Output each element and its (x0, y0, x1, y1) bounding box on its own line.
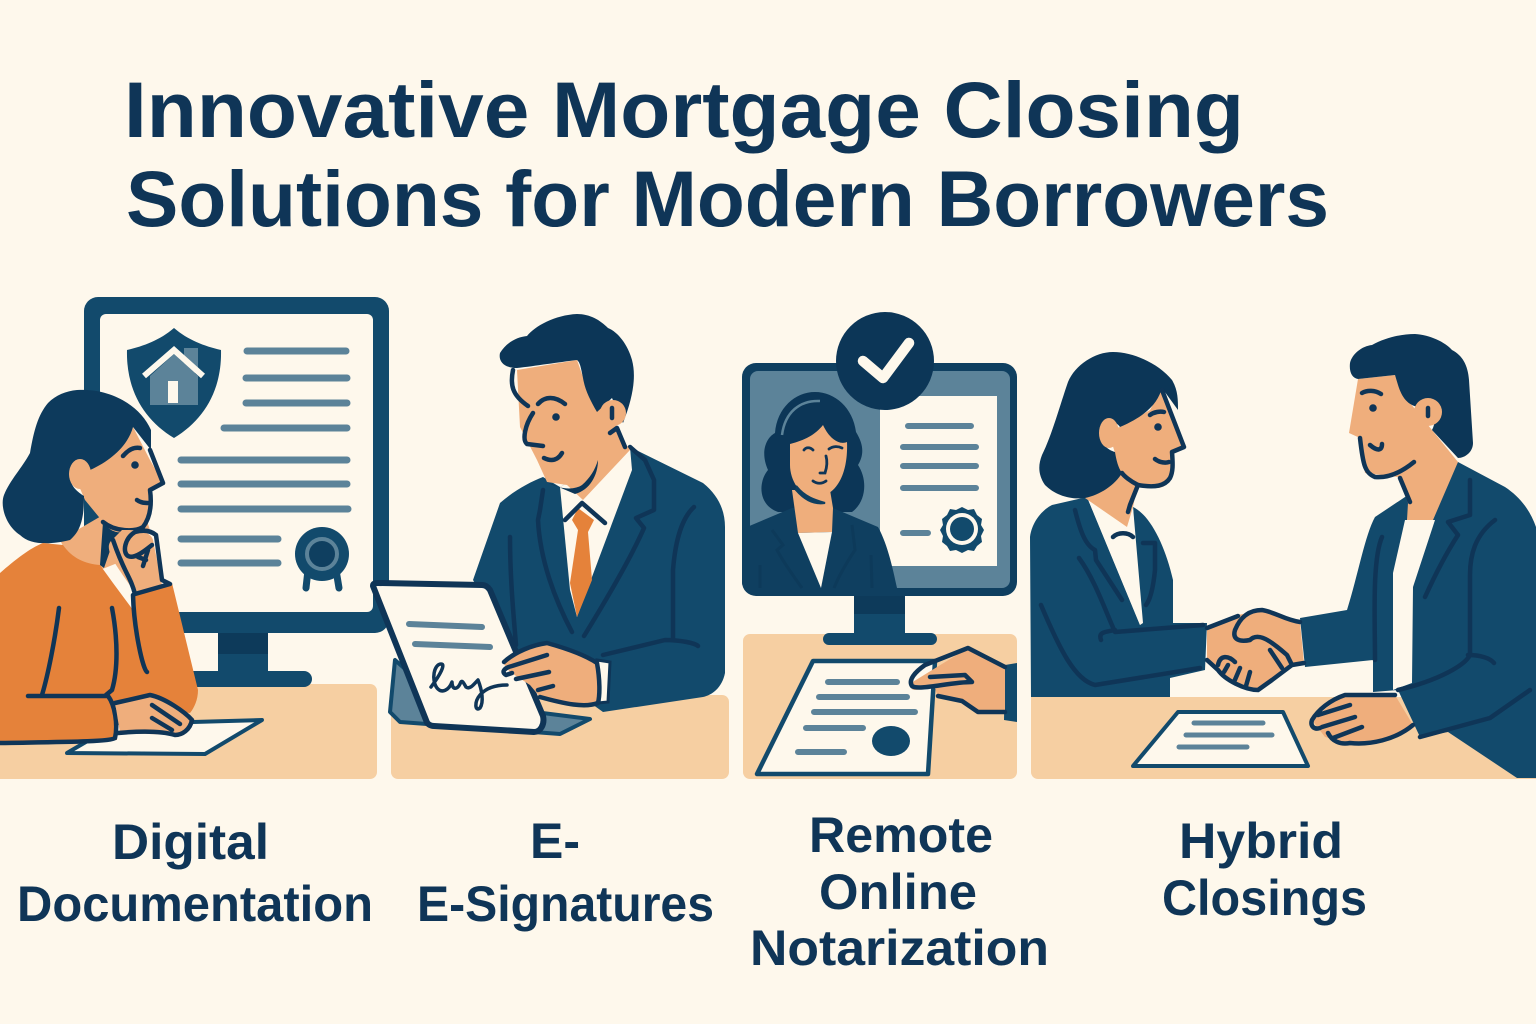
label: hybrid closings (1162, 813, 1367, 926)
tablet with signature (373, 583, 590, 734)
desk (0, 684, 377, 779)
label: remote online notarization: Notarization (750, 920, 1049, 976)
label: e-signatures: E- (530, 813, 580, 869)
desk (1031, 697, 1536, 779)
hand on desk (1311, 693, 1413, 744)
label: e-signatures (417, 813, 714, 932)
handshake (1207, 610, 1304, 690)
label: remote online notarization (750, 807, 1049, 976)
paper on desk (757, 661, 935, 774)
hand holding tablet (503, 643, 610, 705)
label: remote online notarization: Remote (809, 807, 993, 863)
label: remote online notarization: Online (819, 864, 977, 920)
panel: remote online notarization (742, 312, 1017, 779)
desk (391, 695, 729, 779)
title: Innovative Mortgage Closing (124, 65, 1244, 154)
man with suit (473, 314, 725, 712)
woman on video call (742, 392, 897, 588)
hand on paper (910, 648, 1017, 722)
label: digital documentation (17, 814, 373, 932)
label: hybrid closings: Hybrid (1179, 813, 1343, 869)
woman (0, 390, 198, 743)
icon: seal (295, 527, 349, 588)
monitor with document (84, 297, 389, 687)
label: digital documentation: Digital (112, 814, 269, 870)
panel: digital documentation (0, 297, 389, 779)
panel: hybrid closings (1030, 334, 1536, 779)
monitor (742, 363, 1017, 645)
title (124, 65, 1329, 243)
label: e-signatures: E-Signatures (417, 876, 714, 932)
panel: e-signatures (373, 314, 729, 779)
ear (69, 459, 91, 489)
paper (1133, 712, 1308, 766)
document on screen (880, 396, 997, 566)
ear (1099, 418, 1119, 448)
desk (743, 634, 1017, 779)
title: Solutions for Modern Borrowers (126, 154, 1329, 243)
label: hybrid closings: Closings (1162, 870, 1367, 926)
woman (1030, 352, 1207, 697)
paper (67, 720, 262, 754)
man (1300, 334, 1536, 778)
icon: check badge (836, 312, 934, 410)
icon: shield with house (127, 328, 221, 438)
label: digital documentation: Documentation (17, 876, 373, 932)
